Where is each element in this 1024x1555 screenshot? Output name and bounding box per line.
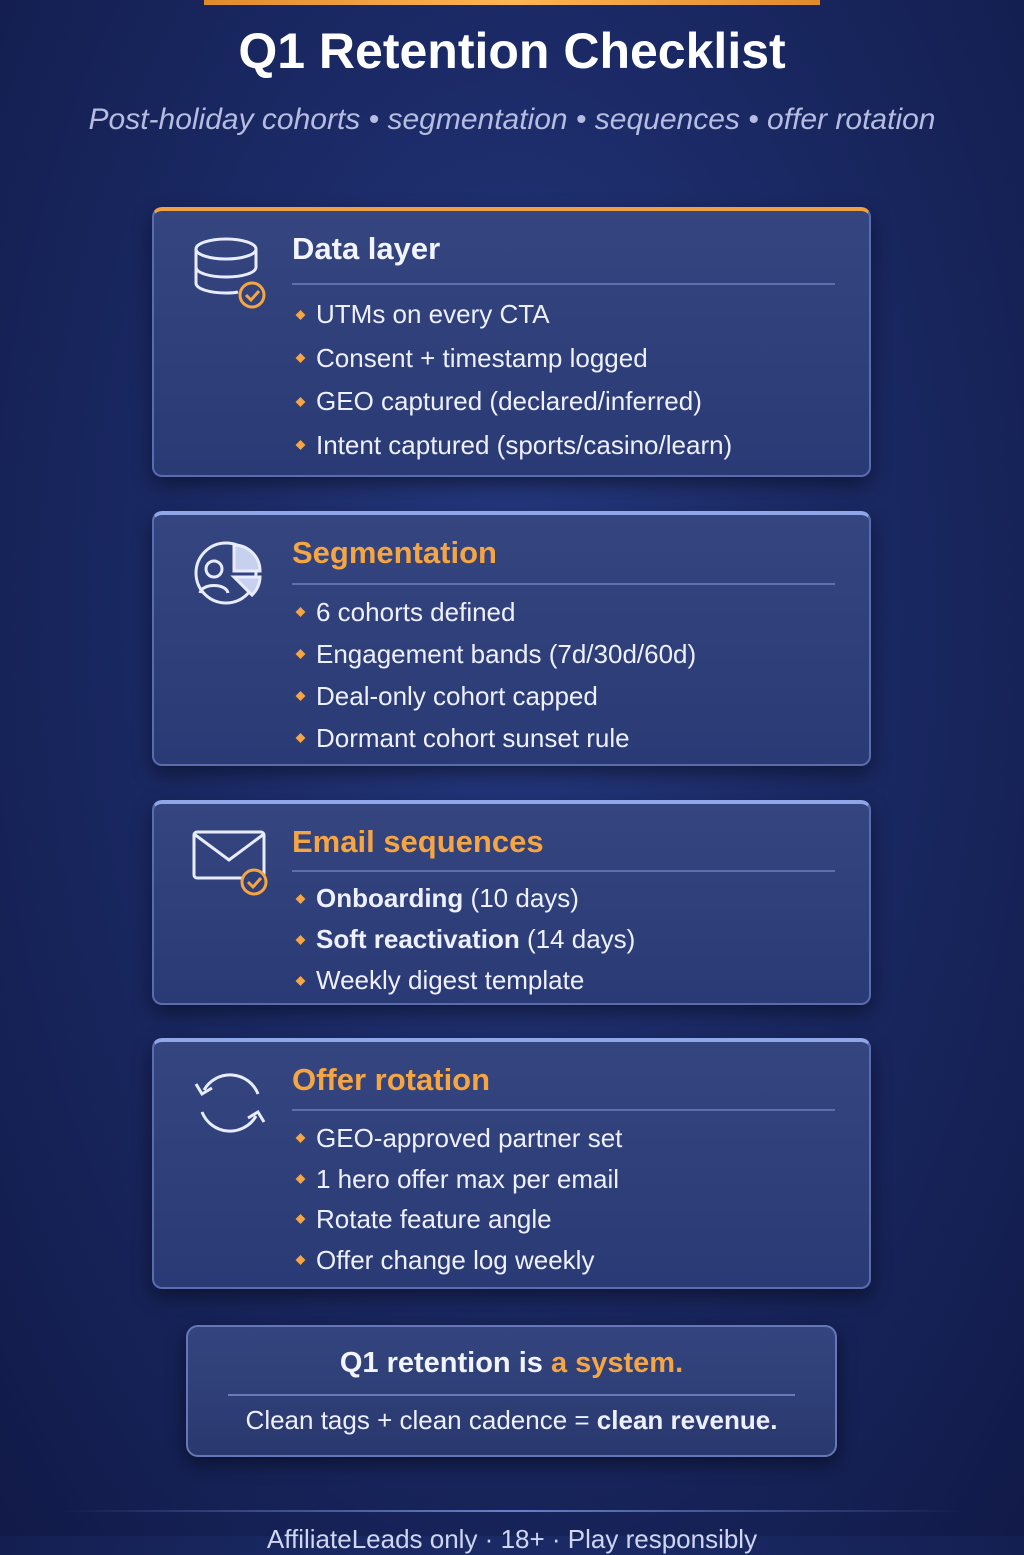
icon: segmentation pie xyxy=(194,542,262,604)
bullets xyxy=(296,1123,622,1274)
icon: rotation arrows xyxy=(194,1073,266,1133)
panel: data layer xyxy=(152,207,871,477)
panel: email sequences xyxy=(152,800,871,1005)
bullets xyxy=(296,597,696,753)
bullets: Dormant cohort sunset rule xyxy=(316,723,630,753)
heading: Email sequences xyxy=(292,824,544,859)
bullets: Consent + timestamp logged xyxy=(316,342,648,372)
bullets: GEO captured (declared/inferred) xyxy=(316,386,702,416)
icon: envelope xyxy=(192,830,268,896)
panel: segmentation xyxy=(152,511,871,766)
bullets: Offer change log weekly xyxy=(316,1244,594,1274)
icon: database xyxy=(194,238,266,308)
bullets: GEO-approved partner set xyxy=(316,1123,622,1153)
bullets: Engagement bands (7d/30d/60d) xyxy=(316,639,696,669)
title: Q1 Retention Checklist xyxy=(238,23,786,79)
bullets: UTMs on every CTA xyxy=(316,299,550,329)
bullets xyxy=(296,883,635,995)
heading: Offer rotation xyxy=(292,1062,490,1097)
heading: Segmentation xyxy=(292,535,497,570)
bullets: Intent captured (sports/casino/learn) xyxy=(316,430,732,460)
bullets: 1 hero offer max per email xyxy=(316,1164,619,1194)
bullets: 6 cohorts defined xyxy=(316,597,515,627)
callout: summary xyxy=(186,1325,837,1457)
subtitle: Post-holiday cohorts • segmentation • sequences • offer rotation xyxy=(88,103,935,136)
callout: summary: Q1 retention is a system. xyxy=(340,1347,683,1379)
panel: offer rotation xyxy=(152,1038,871,1289)
bullets: Onboarding (10 days) xyxy=(316,883,579,913)
bullets: Deal-only cohort capped xyxy=(316,681,598,711)
footer: AffiliateLeads only · 18+ · Play responsibly xyxy=(267,1524,757,1554)
bullets: Weekly digest template xyxy=(316,965,584,995)
bullets: Rotate feature angle xyxy=(316,1204,552,1234)
bullets xyxy=(296,299,732,460)
bullets: Soft reactivation (14 days) xyxy=(316,924,635,954)
callout: summary: Clean tags + clean cadence = clean revenue. xyxy=(246,1405,777,1435)
heading: Data layer xyxy=(292,231,440,266)
